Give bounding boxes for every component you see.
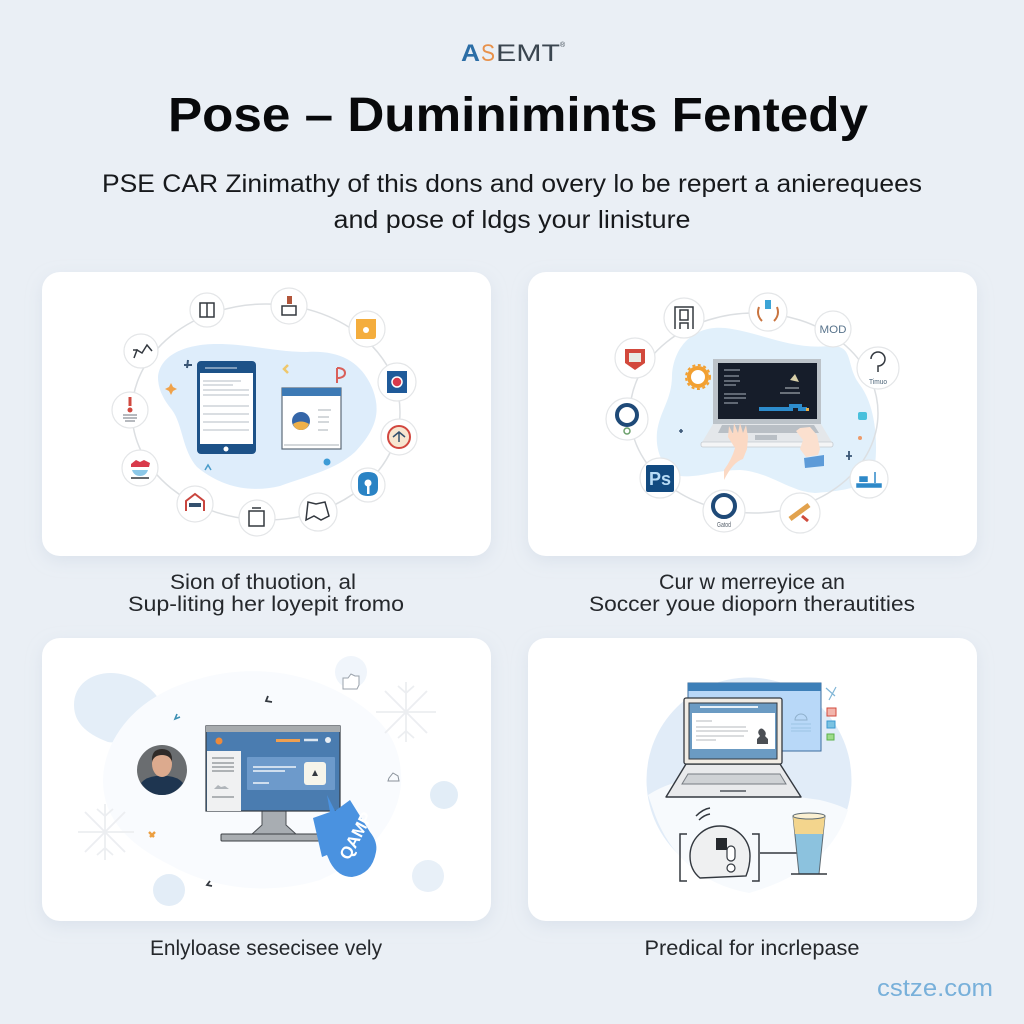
- icon circles: [112, 288, 417, 536]
- pointing hand badge: [313, 795, 376, 877]
- caption: top left: Sion of thuotion, al: [170, 571, 356, 594]
- cloud icon: [343, 674, 359, 689]
- logo: S: [481, 40, 495, 67]
- panel: bottom right laptop and sensor: [528, 638, 977, 921]
- caption: top right: [589, 571, 915, 616]
- logo: ®: [560, 41, 566, 49]
- small accents: [165, 360, 345, 470]
- icon circles: Gatod: [717, 522, 731, 529]
- glass of water: [791, 813, 827, 874]
- browser window: [282, 388, 341, 449]
- subtitle: PSE CAR Zinimathy of this dons and overy lo be repert a anierequees: [102, 170, 922, 198]
- title: Pose – Duminimints Fentedy: [168, 89, 868, 142]
- blue blob background: [158, 344, 377, 489]
- icon circles: MOD: [820, 324, 847, 336]
- logo: A: [461, 40, 480, 67]
- subtitle: [102, 170, 922, 234]
- pale background blob: [103, 671, 401, 888]
- caption: top left: Sup-liting her loyepit fromo: [128, 593, 404, 616]
- caption: bottom left: Enlyloase sesecisee vely: [150, 937, 382, 960]
- hands: [724, 423, 824, 480]
- icon circles: Ps: [649, 469, 671, 489]
- snowflakes: [78, 682, 436, 860]
- connecting ring: [630, 313, 878, 513]
- logo: [461, 40, 566, 67]
- logo: EMT: [496, 40, 560, 67]
- recycle icon: [388, 773, 399, 781]
- laptop: [666, 698, 801, 797]
- panel: bottom left monitor: [42, 638, 491, 921]
- subtitle: and pose of ldgs your linisture: [334, 206, 690, 234]
- caption: bottom right: Predical for incrlepase: [644, 937, 860, 960]
- icon circles: [606, 293, 899, 533]
- watermark: cstze.com: [877, 975, 993, 1002]
- panel: top left icon ring: [42, 272, 491, 556]
- pointing hand badge: QAMP: [336, 809, 376, 863]
- small accents: [149, 696, 272, 886]
- caption: top right: Cur w merreyice an: [659, 571, 845, 594]
- blue blob background: [657, 328, 876, 493]
- back browser window: [688, 683, 821, 751]
- decorative circles: [153, 656, 458, 906]
- pale blue blob: [74, 673, 165, 742]
- avatar: [137, 745, 187, 795]
- sensor device: [680, 808, 797, 881]
- tablet: [197, 361, 256, 454]
- monitor: [206, 726, 340, 841]
- icon circles: Timuo: [869, 379, 887, 386]
- side icons: [826, 687, 836, 740]
- laptop: [701, 359, 833, 447]
- caption: top left: [128, 571, 404, 616]
- panel: top right laptop ring: [528, 272, 977, 556]
- blue circle background: [646, 678, 852, 882]
- caption: top right: Soccer youe dioporn therautities: [589, 593, 915, 616]
- gear and accents: [679, 365, 867, 460]
- connecting ring: [132, 304, 400, 520]
